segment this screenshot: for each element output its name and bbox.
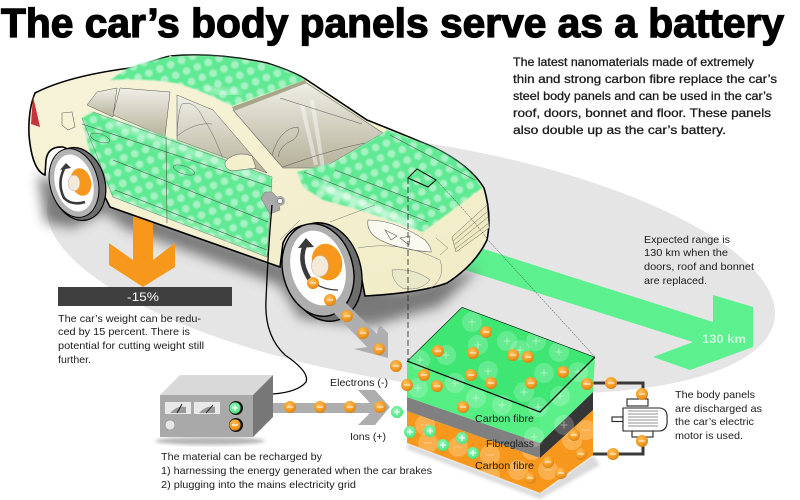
layer label: carbon fibre bottom: Carbon fibre <box>475 460 534 472</box>
charger unit <box>155 375 273 445</box>
weight bar <box>58 287 232 306</box>
intro text: The latest nanomaterials made of extremely <box>513 55 754 69</box>
electrons label: Electrons (-) <box>330 377 388 389</box>
weight arrow <box>109 210 175 287</box>
range note: doors, roof and bonnet <box>644 261 754 273</box>
minus terminal <box>229 418 243 432</box>
seat <box>177 103 225 165</box>
windshield <box>233 82 383 168</box>
ions label: Ions (+) <box>350 431 386 443</box>
weight note <box>58 313 204 366</box>
power cable <box>266 205 307 394</box>
car <box>29 55 489 296</box>
intro text: also double up as the car’s battery. <box>513 123 726 137</box>
mirror <box>225 154 256 171</box>
weight note: potential for cutting weight still <box>58 340 204 352</box>
fuel flap <box>62 112 75 130</box>
headlight prisms <box>385 230 410 245</box>
charger front <box>160 395 253 437</box>
range note: are replaced. <box>644 275 707 287</box>
recharge note: The material can be recharged by <box>161 451 323 463</box>
intro text: thin and strong carbon fibre replace the car’s <box>513 72 777 86</box>
charger top <box>160 375 273 395</box>
rear side window <box>87 88 117 117</box>
car body <box>29 55 489 296</box>
car shadow <box>38 175 480 326</box>
motor note: The body panels <box>675 389 755 401</box>
spoiler fin <box>169 55 182 61</box>
range note: Expected range is <box>644 234 730 246</box>
charge arrow <box>270 390 390 425</box>
headlight <box>368 220 431 252</box>
grille <box>452 205 489 252</box>
background ellipse <box>29 86 793 438</box>
motor note: motor is used. <box>675 430 743 442</box>
intro text: steel body panels and can be used in the car’s <box>513 89 772 103</box>
weight value: -15% <box>127 290 159 304</box>
label: 130 km: 130 km <box>702 334 746 346</box>
charger side <box>253 375 273 437</box>
layer label: fibreglass: Fibreglass <box>486 438 534 450</box>
motor note: the car’s electric <box>675 416 754 428</box>
intro text <box>513 55 777 137</box>
intro text: roof, doors, bonnet and floor. These panels <box>513 106 771 120</box>
bonnet panel <box>297 130 482 232</box>
ions <box>391 406 479 459</box>
recharge note: 1) harnessing the energy generated when the car brakes <box>161 465 432 477</box>
range note: 130 km when the <box>644 247 728 259</box>
power button <box>165 420 175 430</box>
weight note: The car’s weight can be redu- <box>58 313 202 325</box>
middle side window <box>113 88 170 137</box>
roof panel <box>110 56 305 106</box>
fog lamp <box>392 270 430 289</box>
gauges <box>165 402 220 414</box>
weight note: ced by 15 percent. There is <box>58 326 190 338</box>
circuit wires <box>563 383 643 461</box>
lower carbon layer <box>407 410 593 493</box>
title: The car’s body panels serve as a battery <box>1 0 784 46</box>
rear wheel <box>42 141 114 227</box>
range note <box>644 234 754 287</box>
front side window <box>177 95 267 173</box>
tail light <box>31 96 40 127</box>
motor note: are discharged as <box>675 403 762 415</box>
front wheel <box>272 214 373 330</box>
door panels <box>82 112 272 257</box>
charging port <box>261 192 285 214</box>
range arrow: 130 km <box>465 243 753 370</box>
layer label: carbon fibre top: Carbon fibre <box>475 413 534 425</box>
recharge note: 2) plugging into the mains electricity grid <box>161 479 356 491</box>
dashed locator lines <box>408 169 595 361</box>
electrons arrow <box>333 302 388 358</box>
recharge note <box>161 451 432 491</box>
battery panel block <box>407 307 600 499</box>
bumper lines <box>280 205 448 292</box>
electric motor <box>612 399 667 437</box>
weight note: further. <box>58 354 91 366</box>
motor note <box>675 389 762 442</box>
electrons <box>284 277 648 484</box>
upper carbon layer <box>407 361 540 443</box>
fibreglass layer <box>407 397 540 458</box>
plus terminal <box>229 401 243 415</box>
top face <box>407 307 595 412</box>
